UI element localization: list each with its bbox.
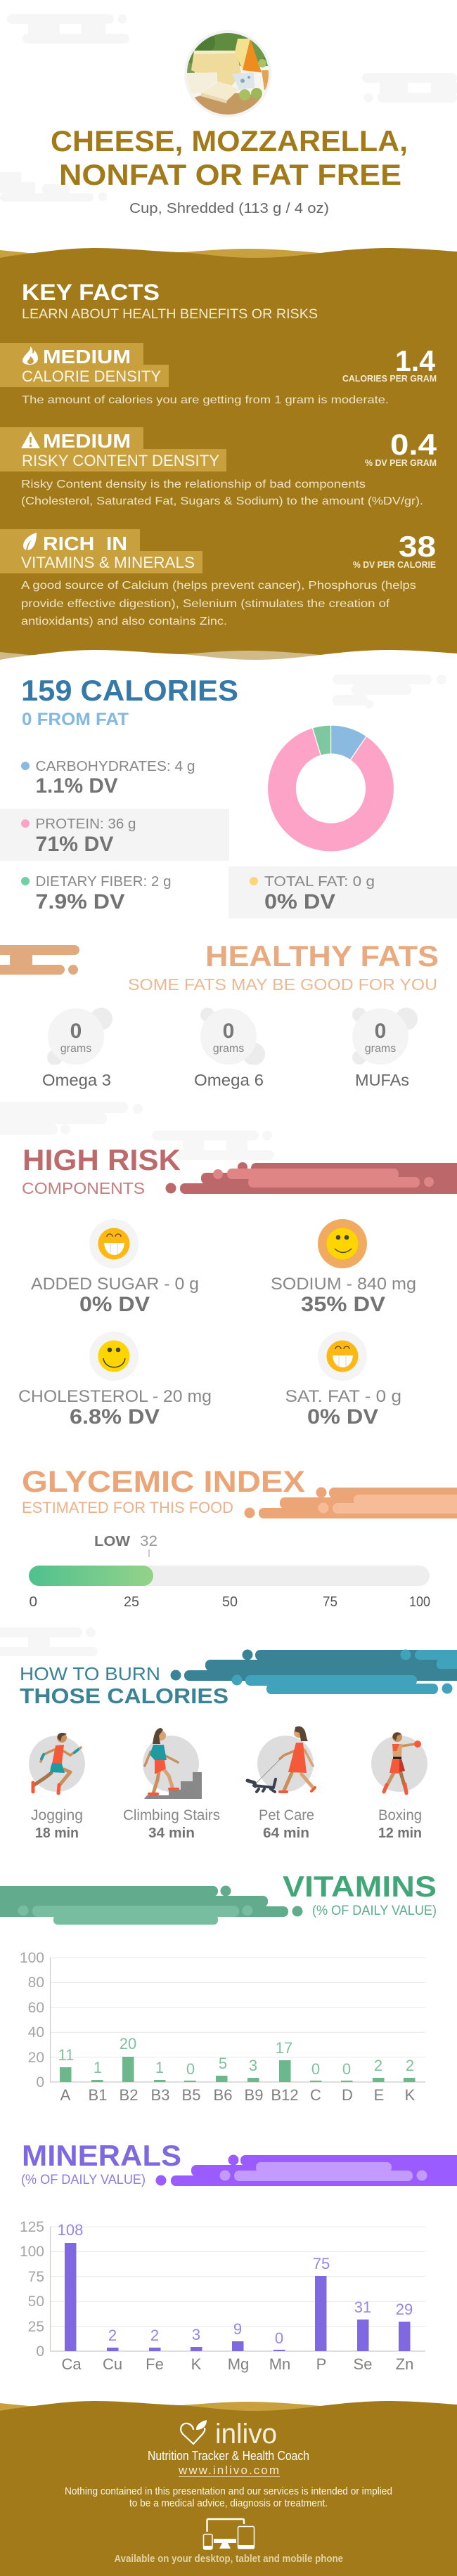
bar chart: vitamins: 0 [186,2060,195,2078]
bar chart: vitamins: B1 [89,2086,107,2104]
stat: MUFAs: grams [365,1043,396,1055]
vitamins subheading: (% OF DAILY VALUE) [312,1904,437,1918]
item: sodium: 35% DV [301,1293,385,1316]
fact: rich in vitamins and minerals: antioxidants) and also contains Zinc. [21,616,227,627]
bar chart: vitamins: 20 [28,2050,44,2066]
icon: smiling face [326,1228,359,1259]
stat: omega 6: Omega 6 [194,1071,264,1089]
bar chart: vitamins [20,1950,425,2104]
glycemic heading: GLYCEMIC INDEX [22,1465,305,1499]
item: sodium [271,1219,416,1316]
bar chart: minerals: Se [354,2355,372,2373]
stat: omega 3 [42,1008,112,1089]
bar chart: vitamins: 2 [374,2057,382,2074]
bar chart: minerals: 75 [313,2255,330,2272]
website link: www.inlivo.com [178,2464,279,2477]
bar chart: minerals: Mn [269,2355,290,2373]
activity: jogging [29,1733,85,1841]
disclaimer [65,2485,392,2509]
panel: vitamins [0,1870,437,2104]
icon: flame [22,346,38,365]
bar chart: vitamins: 2 [406,2057,414,2074]
decorative banner: healthy fats [0,945,79,975]
bar chart: minerals: Fe [146,2355,164,2373]
stat: omega 6: grams [213,1043,244,1055]
icon: grinning face [98,1228,129,1259]
icon: stairs [144,1772,202,1799]
bar chart: vitamins: B6 [214,2086,232,2104]
bar chart: minerals: 75 [28,2269,44,2285]
fact: calorie density [0,343,437,406]
bar chart: vitamins: 40 [28,2024,44,2041]
fact: risky content density: MEDIUM [43,430,131,452]
stat: omega 6 [194,1008,265,1089]
bar chart: minerals: Cu [103,2355,122,2373]
panel: healthy fats [0,939,439,1089]
bar chart: minerals: 29 [396,2301,413,2318]
bar chart: minerals: 2 [150,2327,159,2344]
bar chart: minerals: 31 [354,2298,371,2316]
bar chart: minerals: 0 [275,2329,283,2347]
fact: rich in vitamins and minerals: 38 [399,530,436,563]
activity: pet care: Pet Care [259,1807,314,1823]
decorative banner: glycemic index [245,1487,457,1518]
bar chart: vitamins: 0 [342,2060,351,2078]
bar chart: vitamins: D [342,2086,353,2104]
gauge axis labels: 75 [323,1594,337,1610]
panel: footer [0,2401,457,2576]
fact: risky content density: RISKY CONTENT DENSITY [22,452,219,469]
item: saturated fat: SAT. FAT - 0 g [285,1387,401,1406]
glycemic reading: 32 [140,1533,157,1549]
fact: calorie density: 1.4 [395,344,436,377]
icon: boxer [384,1732,421,1793]
bar chart: minerals: 3 [192,2326,200,2343]
legend: carbohydrates: CARBOHYDRATES: 4 g [35,759,195,774]
disclaimer: to be a medical advice, diagnosis or treatment. [129,2497,328,2509]
title: NONFAT OR FAT FREE [59,158,401,191]
activity: boxing: Boxing [378,1807,422,1823]
activity: climbing stairs: 34 min [148,1826,195,1841]
bar chart: minerals: 2 [108,2327,117,2344]
icon: woman walking dog [247,1726,315,1792]
legend: total fat [250,874,375,913]
stat: omega 3: 0 [70,1020,82,1043]
bar chart: minerals: 0 [36,2343,44,2360]
fact: risky content density: 0.4 [390,428,437,461]
healthy fats heading: HEALTHY FATS [205,939,439,972]
panel: calories [0,674,457,918]
calories from fat: 0 FROM FAT [22,710,129,729]
burn heading line one: HOW TO BURN [20,1663,160,1684]
bar chart: vitamins: B3 [151,2086,169,2104]
icon: runner [33,1733,81,1793]
glycemic reading [94,1533,157,1557]
availability note: Available on your desktop, tablet and mobile phone [114,2553,343,2565]
decorative banner: high risk [166,1162,457,1194]
fact: risky content density [0,427,437,507]
bar chart: minerals [20,2219,425,2373]
fact: risky content density: (Cholesterol, Saturated Fat, Sugars & Sodium) to the amount (%DV/gr). [21,495,423,507]
fact: rich in vitamins and minerals [0,529,436,627]
bar chart: vitamins: C [310,2086,321,2104]
item: cholesterol [18,1332,212,1429]
tagline: Nutrition Tracker & Health Coach [148,2449,309,2463]
panel: high risk components [0,1102,457,1429]
stat: omega 3: grams [60,1043,91,1055]
bar chart: vitamins: 1 [94,2059,102,2076]
fact: rich in vitamins and minerals: VITAMINS & MINERALS [21,554,195,571]
activity: jogging: 18 min [35,1826,79,1841]
bar chart: minerals: Ca [61,2355,82,2373]
burn heading line two: THOSE CALORIES [20,1684,228,1708]
stat: MUFAs [352,1008,418,1089]
bar chart: minerals: 9 [233,2320,242,2338]
fact: calorie density: CALORIES PER GRAM [342,373,437,384]
bar chart: vitamins: 17 [276,2039,292,2057]
bar chart: vitamins: A [60,2086,71,2104]
legend: dietary fiber: 7.9% DV [35,890,125,913]
decorative banner: minerals [156,2154,457,2186]
bar chart: vitamins: 11 [58,2046,74,2064]
calories heading: 159 CALORIES [21,674,238,707]
minerals subheading: (% OF DAILY VALUE) [21,2173,146,2187]
bar chart: minerals: 25 [28,2319,44,2335]
item: saturated fat: 0% DV [307,1405,378,1429]
legend: carbohydrates [21,759,195,798]
item: saturated fat [285,1332,401,1429]
fact: calorie density: MEDIUM [43,346,131,367]
bar chart: vitamins: B2 [120,2086,138,2104]
bar chart: vitamins: B12 [271,2086,299,2104]
bar chart: vitamins: 5 [219,2055,227,2072]
activity: climbing stairs [123,1728,220,1841]
minerals heading: MINERALS [22,2139,181,2172]
stat: omega 3: Omega 3 [42,1071,111,1089]
gauge axis labels: 100 [409,1594,430,1610]
fact: calorie density: CALORIE DENSITY [22,367,161,385]
glycemic reading: LOW [94,1534,130,1549]
bar chart: vitamins: 0 [311,2060,320,2078]
key facts heading: KEY FACTS [22,280,160,305]
gauge axis labels [30,1594,430,1610]
bar chart: vitamins: K [405,2086,416,2104]
legend: dietary fiber: DIETARY FIBER: 2 g [35,874,172,890]
stat: MUFAs: 0 [375,1020,386,1043]
legend: protein [21,817,136,856]
icon: big smile face [98,1341,129,1372]
bar chart: vitamins: 20 [120,2035,136,2053]
disclaimer: Nothing contained in this presentation and our services is intended or implied [65,2485,392,2497]
icon: warning triangle [21,431,40,448]
key facts subheading: LEARN ABOUT HEALTH BENEFITS OR RISKS [22,307,318,322]
logo: inlivo [181,2419,277,2450]
bar chart: minerals: 125 [20,2219,44,2235]
decorative banner: vitamins [0,1886,302,1925]
title [51,124,408,191]
fact: rich in vitamins and minerals: RICH IN [43,533,127,554]
bar chart: minerals: Mg [228,2355,249,2373]
stat: omega 6: 0 [223,1020,234,1043]
bar chart: minerals: Zn [396,2355,413,2373]
background clouds: header [0,14,457,202]
fact: rich in vitamins and minerals: % DV PER CALORIE [353,559,436,570]
activity: boxing [371,1732,427,1841]
bar chart: minerals: 50 [28,2294,44,2310]
icon: grinning face [326,1341,359,1372]
item: cholesterol: 6.8% DV [70,1405,160,1429]
legend: carbohydrates: 1.1% DV [35,774,118,798]
item: cholesterol: CHOLESTEROL - 20 mg [18,1387,212,1406]
healthy fats subheading: SOME FATS MAY BE GOOD FOR YOU [128,975,437,994]
fact: risky content density: % DV PER GRAM [365,457,437,468]
legend: protein: PROTEIN: 36 g [35,817,136,832]
activity: pet care: 64 min [263,1826,309,1841]
gauge bar [29,1566,430,1586]
activity: jogging: Jogging [31,1807,83,1823]
legend: total fat: TOTAL FAT: 0 g [264,874,375,890]
panel: glycemic index [22,1465,457,1610]
bar chart: minerals: 100 [20,2244,44,2260]
bar chart: vitamins: 80 [28,1975,44,1991]
donut chart: macronutrient split [267,725,394,852]
activity: climbing stairs: Climbing Stairs [123,1807,220,1823]
logo: inlivo: inlivo [215,2419,277,2450]
icon: desktop tablet and phone [203,2519,255,2549]
gauge axis labels: 25 [124,1594,139,1610]
panel: how to burn calories [0,1627,457,1841]
fact: rich in vitamins and minerals: A good source of Calcium (helps prevent cancer), Phosphorus (helps [21,580,416,592]
high risk subheading: COMPONENTS [22,1179,145,1197]
serving size subtitle: Cup, Shredded (113 g / 4 oz) [129,201,329,216]
item: added sugar [31,1219,199,1316]
bar chart: vitamins: E [374,2086,384,2104]
icon: leaf [23,533,37,550]
panel: key facts [0,248,457,669]
high risk heading: HIGH RISK [22,1143,181,1176]
bar chart: minerals: P [316,2355,326,2373]
item: sodium: SODIUM - 840 mg [271,1275,416,1294]
fact: risky content density: Risky Content density is the relationship of bad components [21,479,366,490]
stat: MUFAs: MUFAs [355,1071,409,1089]
bar chart: vitamins: 100 [20,1950,44,1966]
food photo: assorted cheese board [183,28,274,119]
icon: woman climbing [145,1728,178,1794]
bar chart: vitamins: 60 [28,2000,44,2016]
fact: rich in vitamins and minerals: provide effective digestion), Selenium (stimulates the creation of [21,598,390,610]
gauge axis labels: 0 [30,1594,37,1610]
gauge axis labels: 50 [222,1594,238,1610]
legend: protein: 71% DV [35,833,114,856]
bar chart: vitamins: B5 [182,2086,200,2104]
vitamins heading: VITAMINS [283,1870,437,1903]
legend: dietary fiber [21,874,172,913]
decorative banner: burn calories [170,1650,457,1694]
item: added sugar: 0% DV [79,1293,150,1316]
bar chart: vitamins: 1 [155,2059,164,2076]
bar chart: vitamins: B9 [245,2086,263,2104]
bar chart: minerals: 108 [58,2221,83,2239]
title: CHEESE, MOZZARELLA, [51,124,408,157]
bar chart: vitamins: 3 [249,2057,257,2074]
item: added sugar: ADDED SUGAR - 0 g [31,1275,199,1294]
activity: pet care [247,1726,315,1841]
glycemic subheading: ESTIMATED FOR THIS FOOD [22,1499,233,1516]
fact: calorie density: The amount of calories you are getting from 1 gram is moderate. [22,394,389,406]
legend: total fat: 0% DV [264,890,335,913]
panel: minerals [20,2139,457,2373]
activity: boxing: 12 min [378,1826,422,1841]
bar chart: minerals: K [191,2355,202,2373]
bar chart: vitamins: 0 [36,2074,44,2090]
